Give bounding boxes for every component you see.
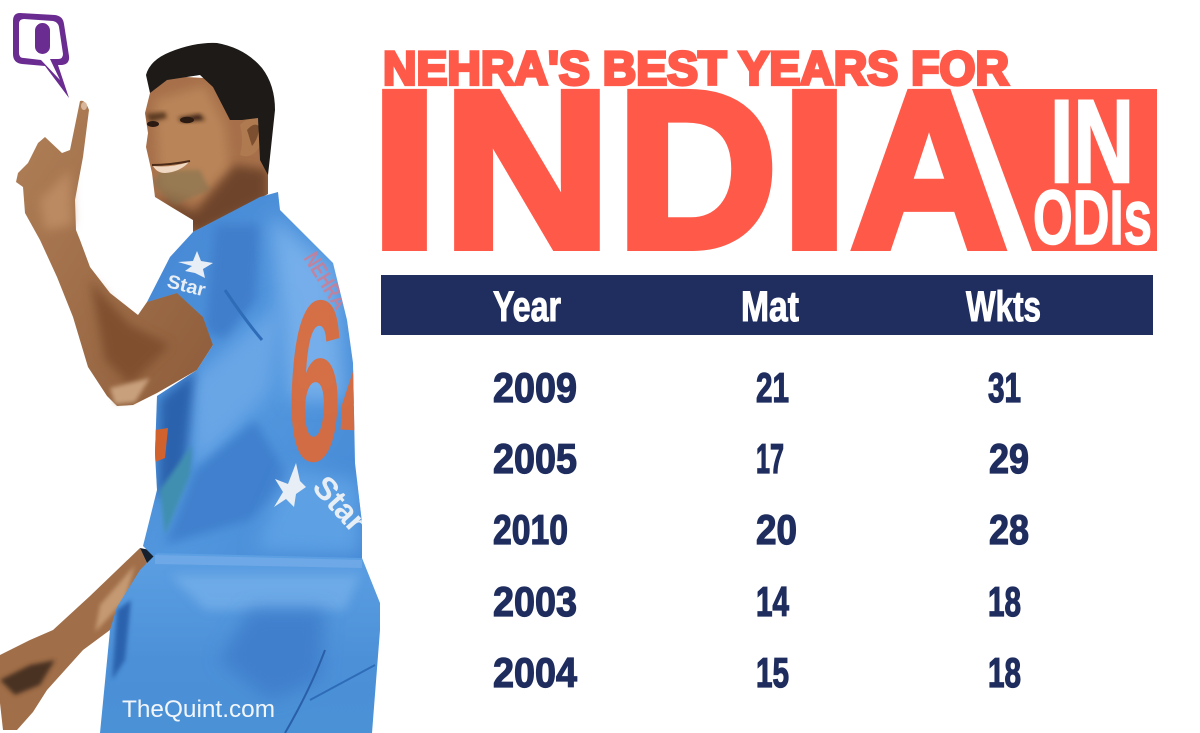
lower arm and hand — [0, 548, 160, 730]
hair — [146, 43, 275, 175]
table row 2004: 2004 — [493, 649, 578, 696]
table header bar — [381, 275, 1153, 335]
title word: INDIA: D — [617, 46, 777, 295]
table header bar: Year — [493, 283, 561, 331]
shoulder sponsor logo: Star — [165, 271, 208, 301]
title line: Nehra's best years for: NEHRA'S BEST YEARS FOR — [383, 42, 1009, 94]
shorts — [100, 553, 380, 733]
table row 2003: 2003 — [493, 578, 577, 625]
table row 2009: 31 — [988, 364, 1021, 411]
logo: The Quint speech bubble — [13, 13, 69, 98]
back sponsor star — [274, 463, 306, 507]
watermark: TheQuint.com: TheQuint.com — [122, 696, 275, 723]
raised arm and hand — [16, 101, 213, 406]
table row 2003: 18 — [988, 578, 1021, 625]
table row 2009: 2009 — [493, 364, 577, 411]
jersey number 64: 64 — [282, 253, 401, 513]
table row 2005: 2005 — [493, 435, 577, 482]
table row 2010: 28 — [989, 506, 1029, 553]
title word: INDIA: I — [371, 46, 438, 294]
shoulder sponsor logo — [165, 251, 213, 301]
jersey — [143, 192, 362, 558]
table row 2005: 29 — [989, 435, 1029, 482]
table row 2010: 20 — [756, 506, 797, 553]
title word: INDIA: N — [443, 46, 611, 294]
title word: INDIA — [371, 46, 1007, 295]
table row 2009 — [493, 364, 1021, 411]
jersey name: NEHRA — [298, 248, 352, 314]
table row 2004: 15 — [756, 649, 789, 696]
table row 2004: 18 — [988, 649, 1021, 696]
title badge: IN ODIs: IN — [1050, 76, 1134, 208]
table row 2005 — [493, 435, 1029, 482]
table row 2005: 17 — [756, 435, 784, 482]
table row 2010 — [493, 506, 1029, 553]
title word: INDIA: A — [851, 46, 1007, 294]
table row 2003 — [493, 578, 1021, 625]
player photo: Nehra in India kit — [0, 43, 401, 733]
neck and face — [145, 75, 268, 235]
title word: INDIA: I — [781, 46, 848, 294]
table header bar: Wkts — [966, 283, 1041, 331]
title badge: IN ODIs — [972, 76, 1157, 261]
table row 2010: 2010 — [493, 506, 568, 553]
table row 2004 — [493, 649, 1021, 696]
back sponsor wordmark: Star — [306, 469, 374, 539]
table row 2003: 14 — [756, 578, 789, 625]
table header bar: Mat — [741, 283, 799, 331]
table row 2009: 21 — [756, 364, 789, 411]
